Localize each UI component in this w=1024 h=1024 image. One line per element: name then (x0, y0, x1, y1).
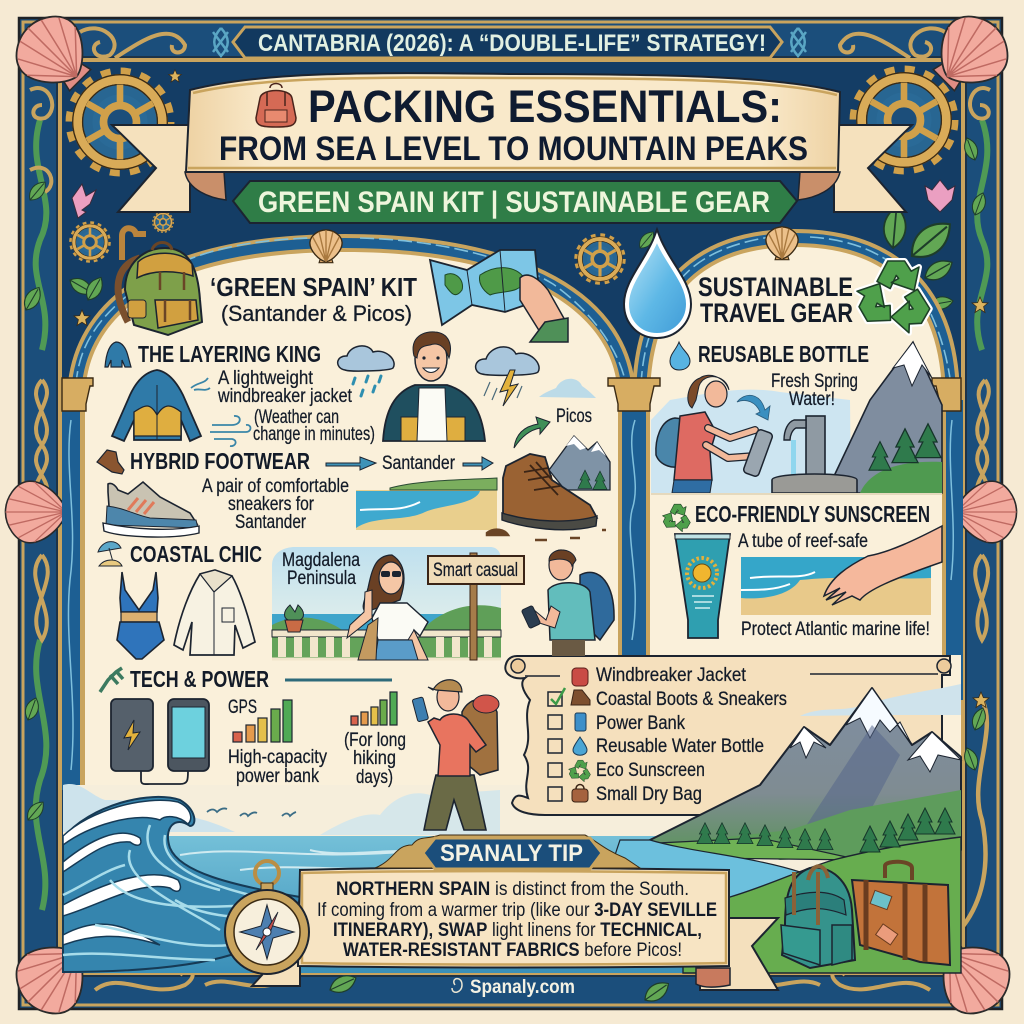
label: picos: Picos (556, 406, 592, 427)
checklist item: eco sunscreen (548, 760, 705, 783)
label: long hiking days: (For long (344, 730, 406, 751)
heading: green spain kit: ‘GREEN SPAIN’ KIT (210, 272, 417, 302)
icon: sunscreen tube (675, 534, 730, 638)
label: reef-safe: A tube of reef-safe (738, 531, 868, 552)
spanaly tip banner: SPANALY TIP (440, 840, 583, 867)
label: gps: GPS (228, 697, 257, 718)
right arch panel (650, 247, 942, 660)
icon: small jacket (105, 342, 131, 367)
label: fresh spring water: Fresh Spring (771, 371, 858, 392)
icon: hiking boot (487, 454, 606, 540)
description: A pair of comfortable (202, 476, 349, 497)
shell keystone: left arch (310, 230, 342, 263)
lower landscape scene (63, 655, 961, 973)
heading: green spain kit: (Santander & Picos) (221, 301, 412, 326)
gear: top right (856, 72, 952, 168)
description: Santander (235, 512, 307, 533)
description: A lightweight (218, 368, 314, 389)
compass (225, 861, 309, 974)
label: magdalena peninsula: Peninsula (287, 568, 356, 589)
scallop shell: right middle (951, 481, 1017, 543)
checklist item: boots: Coastal Boots & Sneakers (596, 689, 787, 710)
icon: linen shirt (174, 570, 255, 655)
mountains behind boot (549, 436, 610, 490)
mountains and valley (600, 684, 961, 973)
chart: signal bars one (233, 700, 292, 742)
gear: top left (72, 74, 168, 170)
section: the layering king (105, 332, 596, 446)
figure: woman filling bottle (656, 375, 773, 493)
checklist item: dry bag (548, 784, 702, 805)
section: sustainable travel gear (627, 238, 935, 336)
heading: TRAVEL GEAR (700, 298, 853, 328)
label: power bank: High-capacity (228, 747, 327, 768)
signpost: smart casual: Smart casual (433, 560, 518, 581)
description: sneakers for (228, 494, 315, 515)
icon: power bank and phone (111, 699, 209, 784)
heading: ECO-FRIENDLY SUNSCREEN (695, 501, 930, 527)
small gears and flora in the spandrels (67, 70, 958, 325)
icon: beach umbrella (98, 542, 122, 566)
checklist item: power bank: Power Bank (596, 713, 685, 734)
label: long hiking days (344, 730, 406, 788)
caption: Protect Atlantic marine life! (741, 619, 930, 640)
checklist scroll (505, 656, 951, 815)
checklist item: water bottle: Reusable Water Bottle (596, 736, 764, 757)
section: hybrid footwear (97, 406, 610, 540)
scene: magdalena peninsula (272, 547, 501, 660)
icon: sneaker (103, 482, 199, 537)
left arch panel (85, 252, 618, 800)
beach scene (356, 478, 497, 530)
description (202, 476, 349, 533)
heading: REUSABLE BOTTLE (698, 341, 869, 367)
tip line 4: WATER-RESISTANT FABRICS before Picos! (343, 940, 682, 961)
figure: man with backpack and phone (521, 550, 614, 656)
ocean waves (63, 797, 300, 972)
icon: rain cloud (338, 346, 394, 396)
top banner: CANTABRIA (2026): A “DOUBLE-LIFE” STRATEGY! (258, 30, 766, 57)
arch wave patterns (76, 237, 951, 385)
heading: SUSTAINABLE (698, 272, 853, 302)
icon: water fountain (772, 416, 857, 493)
label: magdalena peninsula (282, 550, 360, 589)
label: santander: Santander (382, 453, 456, 474)
scallop shell: top right (919, 3, 1021, 105)
description: change in minutes) (253, 424, 375, 445)
figure: woman hiker with phone (412, 680, 499, 830)
icon: green backpack (118, 242, 202, 335)
arrow to boot (463, 457, 493, 470)
label: long hiking days: hiking (353, 748, 396, 769)
tip line 1: NORTHERN SPAIN is distinct from the South. (336, 879, 689, 900)
title ribbon tails (112, 125, 912, 212)
icon: blue swimsuit (117, 572, 164, 659)
icon: small boot (97, 450, 124, 474)
section: eco-friendly sunscreen (651, 493, 942, 640)
arrow to santander (326, 457, 376, 470)
title ribbon (186, 73, 840, 172)
section: tech and power (100, 666, 499, 830)
icon: map with hand (430, 250, 568, 342)
brown suitcase (852, 862, 950, 965)
label: magdalena peninsula: Magdalena (282, 550, 360, 571)
description: (Weather can (254, 407, 339, 428)
description (217, 368, 375, 445)
beach scene (741, 557, 931, 615)
figure: woman with sunglasses (347, 555, 428, 660)
label: power bank: power bank (236, 766, 319, 787)
scallop shell: bottom right (921, 925, 1023, 1024)
figure: smiling man in jacket (383, 332, 485, 441)
label: long hiking days: days) (356, 767, 393, 788)
teal backpack (781, 866, 855, 968)
green subtitle banner (233, 181, 797, 223)
column details (62, 400, 963, 790)
label: power bank (228, 747, 327, 787)
checklist item: eco sunscreen: Eco Sunscreen (596, 760, 705, 781)
scene: spring water (651, 342, 942, 493)
tip line 3: ITINERARY), SWAP light linens for TECHNICAL, (333, 920, 702, 941)
scallop shell: bottom left (3, 925, 105, 1024)
label: fresh spring water (771, 371, 858, 410)
checklist item: windbreaker: Windbreaker Jacket (596, 665, 747, 686)
tip box (298, 868, 729, 968)
icon: storm cloud (476, 347, 596, 406)
title line 2: FROM SEA LEVEL TO MOUNTAIN PEAKS (219, 130, 808, 168)
icon: wind lines (191, 378, 250, 446)
spanaly tip banner (375, 835, 640, 869)
scallop shell: left middle (5, 481, 71, 543)
icon: red backpack (256, 84, 296, 127)
heading: THE LAYERING KING (138, 341, 321, 367)
heading: HYBRID FOOTWEAR (130, 448, 310, 474)
section: coastal chic (98, 541, 614, 660)
section: reusable bottle (651, 341, 942, 493)
icon: windbreaker jacket (112, 370, 201, 441)
icon: small drop (670, 342, 690, 370)
checklist item: boots (548, 688, 787, 710)
signpost: smart casual (428, 553, 524, 660)
shell keystone: right arch (766, 227, 798, 260)
green subtitle banner: GREEN SPAIN KIT | SUSTAINABLE GEAR (258, 186, 770, 219)
heading: COASTAL CHIC (130, 541, 262, 567)
column capitals (62, 378, 961, 411)
heading (698, 272, 853, 328)
footer website: Spanaly.com (470, 977, 575, 998)
curved arrow to picos (514, 417, 550, 448)
heading: green spain kit (210, 272, 417, 326)
icon: hand applying sunscreen (824, 526, 942, 605)
label: fresh spring water: Water! (789, 389, 835, 410)
tip line 2: If coming from a warmer trip (like our 3-DAY SEVILLE (317, 900, 717, 921)
icon: recycling symbol (852, 261, 935, 336)
title line 1: PACKING ESSENTIALS: (308, 81, 782, 132)
decorative underline (285, 678, 392, 682)
tip box ribbon tails (250, 918, 778, 990)
icon: large water drop (627, 238, 688, 335)
icon: small recycling (660, 504, 692, 533)
checklist item: power bank (548, 713, 685, 734)
scallop shell: top left (3, 3, 105, 105)
chart: signal bars two (351, 692, 397, 725)
checklist item: dry bag: Small Dry Bag (596, 784, 702, 805)
divider band (651, 493, 942, 495)
heading: TECH & POWER (130, 666, 269, 692)
description: windbreaker jacket (217, 386, 353, 407)
icon: plug (100, 668, 123, 692)
